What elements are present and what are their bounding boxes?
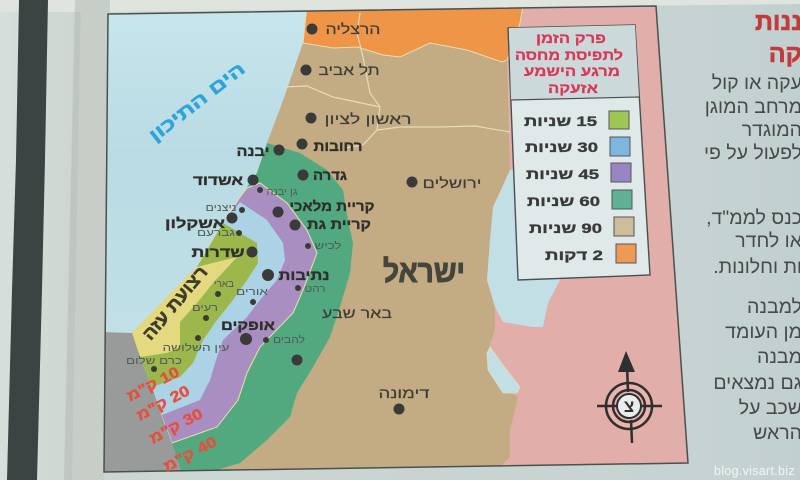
watermark: blog.visart.biz (714, 464, 795, 478)
article paragraph 2: כנס לממ"ד, (706, 207, 800, 229)
label: Mediterranean Sea: הים התיכון (145, 58, 249, 146)
city markers and names: אשדוד (193, 172, 244, 188)
distance labels: 40 ק"מ (161, 433, 220, 476)
city markers and names: ניצנים (206, 203, 237, 214)
icon: compass: צ (624, 397, 634, 416)
legend row: 90 seconds (529, 217, 634, 236)
city markers and names: אורים (236, 287, 269, 298)
legend row: 15 seconds: 15 שניות (524, 113, 597, 129)
city markers and names: אשקלון (165, 215, 226, 231)
map: land (172, 44, 518, 470)
legend row: 90 seconds: 90 שניות (529, 220, 602, 236)
map: upper Jordan water (487, 170, 560, 327)
city markers and names: לכיש (314, 240, 342, 252)
legend row: 60 seconds: 60 שניות (527, 193, 600, 209)
legend row: 2 minutes (545, 244, 636, 263)
legend row: 45 seconds (526, 163, 631, 182)
article paragraph 2: או לחדר (735, 230, 800, 252)
city markers and names: רחובות (314, 138, 362, 154)
legend row: 15 seconds (524, 111, 629, 129)
article paragraph 1: לפעול על פי (704, 142, 800, 164)
city markers and names: הרצליה (326, 21, 380, 37)
city markers and names: תל אביב (318, 62, 380, 78)
city markers and names: רעים (192, 303, 218, 314)
city markers and names: באר שבע (322, 305, 392, 321)
black vertical column bar (7, 0, 48, 480)
map: 2 minutes orange zone (303, 5, 523, 62)
icon: compass (597, 351, 662, 443)
map: grey Sinai (104, 332, 181, 472)
article paragraph 3: גם נמצאים (713, 372, 800, 394)
legend row: 60 seconds (527, 190, 632, 209)
map: 30 seconds blue band (132, 202, 285, 415)
city markers and names: קריית מלאכי (290, 198, 374, 214)
distance labels (124, 364, 220, 476)
legend title (509, 25, 639, 100)
map: pink neighbouring territory (487, 5, 690, 470)
article paragraph 1 (704, 72, 800, 164)
article paragraph 1: עקה או קול (712, 72, 800, 94)
city markers and names: גדרה (313, 167, 347, 183)
article paragraph 1: מרחב המוגן (705, 96, 800, 118)
city markers and names (126, 21, 482, 414)
city markers and names: אופקים (221, 317, 276, 333)
legend (508, 25, 650, 280)
map frame (104, 6, 688, 472)
city markers and names: עין השלושה (162, 342, 230, 354)
article headline (755, 8, 800, 68)
city markers and names: יבנה (236, 143, 270, 159)
map: sea (100, 5, 307, 333)
panel: map (100, 5, 690, 480)
city markers and names: ירושלים (422, 175, 482, 191)
map: 45 seconds purple band (132, 183, 317, 443)
city markers and names: גברעם (197, 228, 235, 239)
city markers and names: גן יבנה (266, 187, 298, 198)
city markers and names: דימונה (378, 385, 430, 401)
city markers and names: להבים (273, 334, 305, 346)
city markers and names: בארי (214, 279, 234, 290)
legend row: 30 seconds: 30 שניות (525, 139, 598, 155)
legend title: אזעקה (548, 80, 599, 96)
legend row: 45 seconds: 45 שניות (526, 166, 599, 182)
article paragraph 3 (713, 296, 800, 444)
article paragraph 3: מן העומד (725, 321, 800, 343)
label: Gaza Strip: רצועת עזה (138, 262, 212, 344)
city markers and names: רהט (304, 284, 326, 295)
city markers and names: נתיבות (278, 267, 330, 283)
city markers and names: כרם שלום (126, 355, 182, 367)
map: Dead Sea (487, 347, 520, 393)
label: Israel: ישראל (383, 254, 465, 289)
legend title: לתפיסת מחסה (515, 47, 623, 63)
city markers and names: קריית גת (307, 216, 371, 232)
map: district borders (283, 13, 510, 148)
article paragraph 2: ות וחלונות. (713, 256, 800, 278)
distance labels: 30 ק"מ (147, 405, 206, 448)
city markers and names: ראשון לציון (324, 111, 412, 127)
legend title: מרגע הישמע (524, 63, 620, 79)
legend row: 30 seconds (525, 137, 630, 156)
article paragraph 2 (706, 207, 800, 278)
distance labels: 20 ק"מ (134, 382, 193, 425)
city markers and names: שדרות (192, 244, 244, 260)
map: 60 seconds green band (172, 143, 353, 470)
legend title: פרק הזמן (536, 30, 606, 46)
distance labels: 10 ק"מ (124, 364, 182, 405)
legend row: 2 minutes: 2 דקות (545, 247, 603, 263)
map: Gaza Strip (132, 257, 237, 357)
map: 15 seconds lime band (132, 223, 258, 387)
